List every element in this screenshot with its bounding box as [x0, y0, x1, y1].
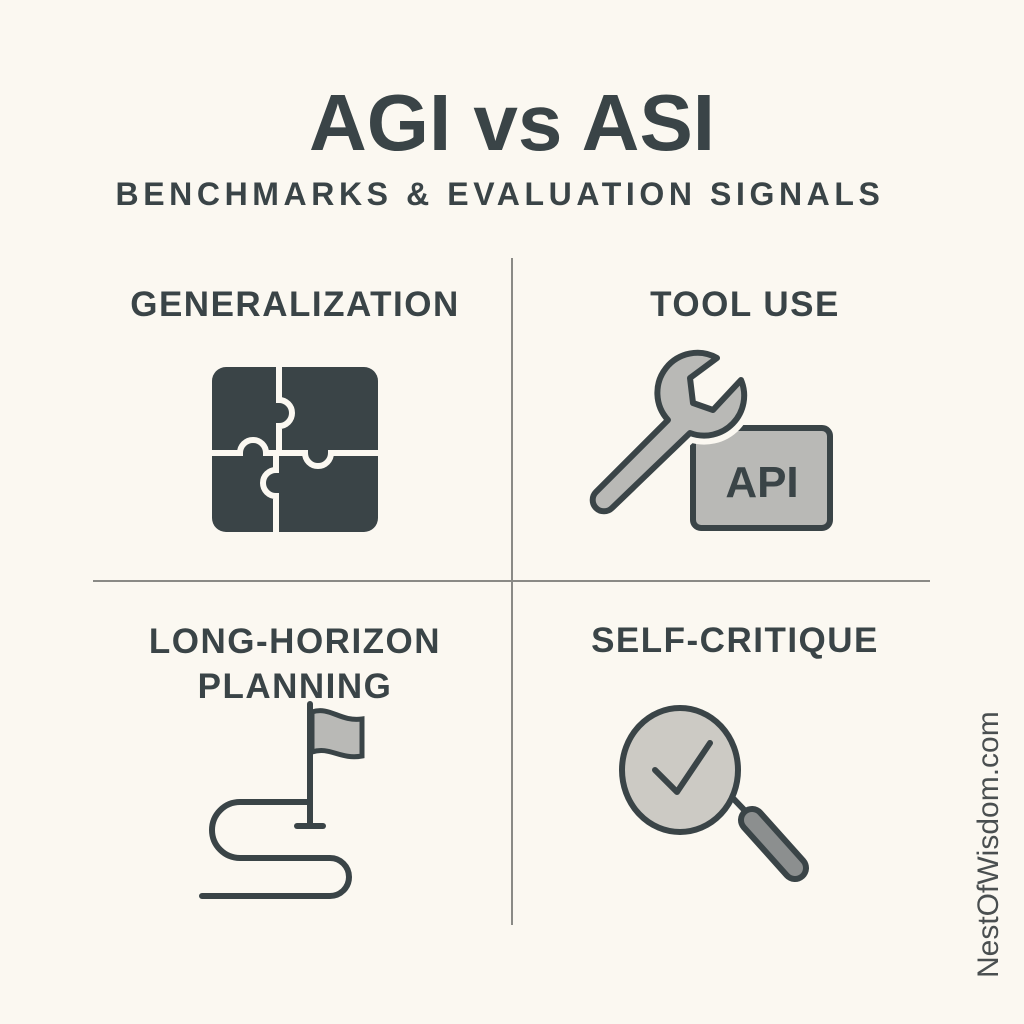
heading: generalization: GENERALIZATION: [130, 285, 460, 324]
watermark: NestOfWisdom.com: [972, 711, 1005, 978]
heading: long-horizon planning: LONG-HORIZON: [149, 622, 441, 661]
icon: wrench and API: API: [725, 458, 799, 507]
title: AGI vs ASI: [309, 78, 715, 167]
icon: magnifier with check: [622, 708, 795, 868]
heading: tool use: TOOL USE: [650, 285, 840, 324]
icon: flag and path: [202, 704, 362, 896]
icon: wrench and API: [593, 353, 830, 528]
subtitle: BENCHMARKS & EVALUATION SIGNALS: [116, 176, 884, 212]
heading: long-horizon planning: PLANNING: [198, 667, 392, 706]
heading: self-critique: SELF-CRITIQUE: [591, 621, 879, 660]
icon: puzzle: [212, 367, 378, 532]
